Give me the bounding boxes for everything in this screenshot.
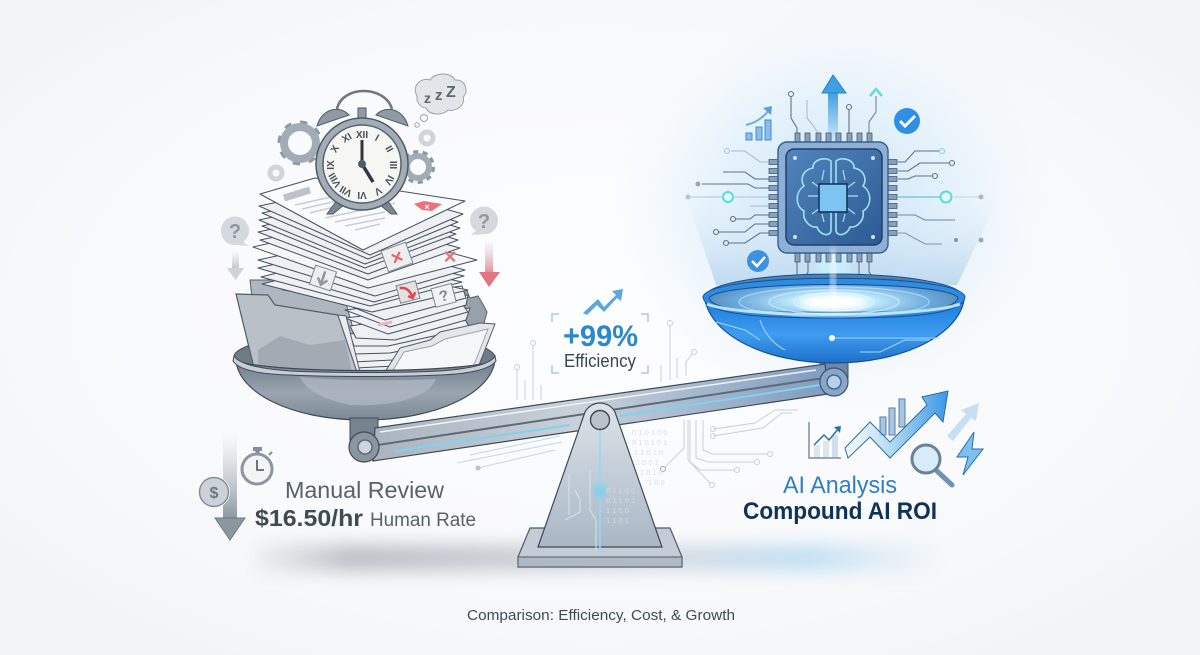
- caption: Comparison: Efficiency, Cost, & Growth: [467, 608, 735, 624]
- icon: red cross on sheet: ×: [444, 244, 456, 269]
- text: white x on red marker: ×: [424, 202, 430, 212]
- tag: red cross: [381, 242, 413, 273]
- icon: alarm clock: VII: [338, 183, 354, 198]
- water glow: [800, 295, 868, 311]
- icon: faded arrow: [947, 403, 979, 441]
- binary text background: [632, 428, 667, 487]
- left bowl rim: [233, 356, 496, 376]
- icon: sleep thought cloud: [415, 74, 466, 127]
- icon: small teal arrow and trace: [869, 89, 882, 133]
- chip pins: [769, 133, 897, 262]
- right folder: [385, 323, 495, 372]
- bowl circuit detail: [716, 320, 940, 352]
- binary text background: 1 1 0 1 0: [634, 448, 663, 457]
- icon: gray question bubble with down arrow: [221, 217, 249, 280]
- beam bar: [373, 364, 828, 461]
- icon: sleep thought cloud: z: [435, 87, 442, 104]
- icon: alarm clock: VIII: [327, 170, 344, 189]
- beam groove: [378, 378, 824, 445]
- icon: efficiency arrow: [583, 289, 623, 315]
- beam glow stripe: [395, 385, 820, 451]
- icon: check badge top: [894, 108, 920, 134]
- value: +99%: +99%: [563, 320, 638, 353]
- light beam: [831, 250, 835, 305]
- binary text background: 0 1 0 1 0 1: [632, 438, 667, 447]
- icon: alarm clock: X: [329, 143, 342, 155]
- label: hourly rate: $16.50/hr: [255, 505, 363, 531]
- tag: gray arrow: [309, 265, 337, 291]
- back folder tab: [250, 280, 365, 370]
- icon: alarm clock: I: [373, 133, 381, 144]
- binary text background: 1 0 0: [648, 478, 665, 487]
- icon: alarm clock: IV: [381, 173, 396, 187]
- paper tags: [309, 242, 456, 307]
- right bowl front lip: [707, 304, 960, 314]
- tag: red arrow: [396, 281, 420, 303]
- label: compound AI ROI: Compound AI ROI: [743, 498, 937, 525]
- icon: bars behind zigzag: [880, 399, 905, 435]
- circuit traces around chip: [686, 92, 984, 296]
- stand pin: [590, 410, 610, 430]
- icon: falling arrow with coin and stopwatch: [198, 433, 272, 540]
- left pivot: [349, 432, 379, 462]
- stand binary digits: 0 1 1 0 0: [606, 486, 635, 495]
- text: manual review: [255, 477, 476, 531]
- stand binary digits: 1 1 0 1: [606, 516, 629, 525]
- icon: check badge bottom: [747, 250, 769, 272]
- stopwatch: [242, 447, 272, 484]
- icon: sleep thought cloud: Z: [446, 84, 456, 101]
- white paper in right folder: [392, 329, 488, 372]
- icon: alarm clock: II: [382, 144, 395, 155]
- icon: zigzag arrow: [845, 391, 948, 458]
- paper stack: [253, 178, 477, 372]
- callout brackets: [552, 314, 648, 373]
- left bowl highlight: [300, 377, 436, 405]
- water rings: [739, 287, 929, 317]
- panel: manual review pile and left pan: [221, 74, 500, 420]
- label: AI analysis: AI Analysis: [783, 472, 897, 499]
- beam upper highlight: [380, 370, 816, 432]
- decorative circuit lines behind the scale: [457, 320, 798, 488]
- chip corner screws: [793, 156, 875, 239]
- folder highlights: [258, 336, 352, 372]
- icon group: AI growth icons: [809, 391, 983, 485]
- stand glow spot: [594, 485, 606, 497]
- icon: magnifier: [912, 445, 952, 485]
- document lines on top sheet: [284, 190, 395, 230]
- icon: bars and growth arrow: [746, 106, 772, 140]
- icon: alarm clock: XI: [340, 131, 354, 146]
- scale beam: [349, 362, 848, 462]
- binary text background: 1 0 0 1: [636, 458, 659, 467]
- text: AI analysis: [743, 472, 937, 525]
- chip face: [786, 149, 882, 245]
- icon: red marker on sheet: [414, 201, 442, 211]
- right bracket: [820, 362, 848, 382]
- right bowl rim: [703, 278, 965, 318]
- stand glow line: [599, 430, 601, 555]
- tag: red cross: ×: [388, 246, 407, 270]
- right bowl outer: [705, 300, 964, 363]
- icon: alarm clock: VI: [357, 189, 367, 200]
- arrow head: [215, 518, 245, 540]
- right pivot: [820, 368, 848, 396]
- icon: alarm clock: III: [387, 161, 398, 169]
- icon: mini chart: [809, 422, 841, 458]
- faint red mark on sheet: [378, 322, 392, 325]
- icon: sleep thought cloud: z: [424, 90, 431, 106]
- callout: efficiency: [552, 289, 648, 373]
- icon: red question bubble with down arrow: [470, 207, 500, 287]
- label: human rate: Human Rate: [370, 510, 476, 531]
- tag: question mark: ?: [437, 287, 451, 306]
- icon: up arrow: [822, 75, 846, 142]
- left folder: [236, 294, 357, 372]
- label: efficiency: Efficiency: [564, 351, 636, 371]
- panel: AI chip and right pan: [686, 75, 1000, 363]
- stand binary digits: 0 1 1 0 1: [606, 496, 635, 505]
- stand triangle: [538, 403, 662, 547]
- folder pages edge: [338, 315, 360, 372]
- bowl glint: [829, 335, 835, 341]
- base front edge: [518, 557, 682, 567]
- icon: gears behind clock: [270, 123, 433, 182]
- icon: central core square: [819, 184, 847, 212]
- icon: red question bubble with down arrow: ?: [478, 211, 490, 233]
- light cone: [686, 195, 1000, 285]
- icon: alarm clock: [316, 91, 408, 214]
- left bracket: [350, 418, 378, 447]
- label: manual review: Manual Review: [285, 477, 444, 503]
- right bowl interior: [706, 274, 962, 318]
- icon: alarm clock: V: [372, 184, 383, 197]
- coin: $: [210, 485, 219, 502]
- binary text background: 1 0 1 0: [640, 468, 663, 477]
- icon: alarm clock: IX: [326, 160, 337, 170]
- binary text background: 0 1 0 1 0 0: [632, 428, 667, 437]
- stand binary digits: 1 1 0 0: [606, 506, 629, 515]
- icon: alarm clock: XII: [356, 130, 368, 141]
- arrow shaft: [223, 433, 237, 519]
- stand base: [518, 528, 682, 567]
- chip body: [778, 142, 888, 253]
- left bowl: [236, 360, 495, 420]
- icon: gray question bubble with down arrow: ?: [229, 221, 241, 243]
- tag: question mark: [431, 283, 456, 307]
- stand circuit: [565, 470, 596, 550]
- icon: brain outline: [797, 159, 870, 235]
- fulcrum stand: [518, 403, 682, 567]
- shadow pile behind papers: [440, 285, 487, 345]
- central light column: [818, 240, 848, 302]
- icon: lightning: [957, 432, 983, 475]
- stand binary digits: [606, 486, 635, 525]
- bowl back rim: [234, 345, 495, 372]
